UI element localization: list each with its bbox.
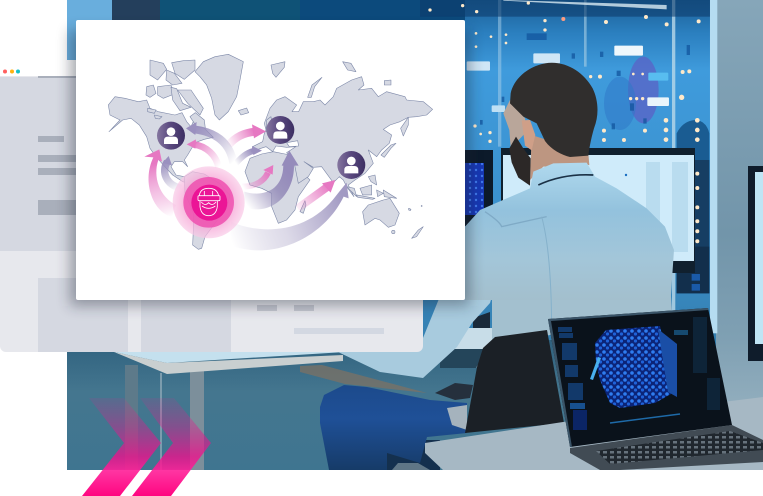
arrow to africa pink — [242, 165, 273, 187]
upper sidebar block — [0, 77, 100, 251]
window dots — [3, 70, 20, 74]
chevron 1 — [82, 398, 161, 496]
left dark monitor — [465, 150, 493, 226]
laptop screen data cloud — [595, 326, 671, 408]
indonesia — [347, 175, 397, 199]
rear desk and keyboard — [440, 312, 493, 368]
head — [503, 63, 597, 186]
browser title bar — [0, 60, 77, 77]
black sea — [287, 141, 299, 147]
greenland — [195, 54, 243, 120]
window body — [0, 76, 423, 352]
arrow to canada purple — [186, 122, 233, 163]
lower content blocks — [38, 278, 128, 352]
front desk — [425, 397, 763, 470]
concrete wall — [716, 0, 763, 402]
chevron 2 — [132, 398, 211, 496]
hair — [510, 63, 597, 157]
new zealand — [412, 227, 423, 238]
shirt sleeve — [339, 298, 491, 378]
australia — [363, 198, 399, 227]
photo background glass wall — [423, 0, 716, 347]
novaya zemlya — [308, 77, 322, 97]
user marker europe — [266, 116, 294, 144]
user marker asia — [337, 151, 365, 179]
arrow to india pink — [298, 180, 335, 208]
hand — [435, 383, 473, 400]
madagascar — [300, 201, 306, 213]
arrow to middle east purple — [244, 151, 299, 209]
iceland — [238, 108, 249, 115]
shirt body — [465, 163, 674, 300]
neck — [530, 135, 589, 180]
world threat map — [108, 54, 433, 250]
continents — [108, 54, 433, 249]
lower torso — [492, 295, 672, 340]
laptop — [548, 308, 763, 470]
chair base — [392, 463, 430, 470]
background browser window — [0, 60, 423, 352]
right monitor — [748, 166, 763, 361]
japan — [381, 143, 396, 157]
kamchatka island — [401, 117, 408, 136]
icon: masked hacker — [198, 188, 220, 216]
attack arrows — [144, 122, 349, 250]
glass panel frames and lights — [420, 0, 717, 333]
under desk shadow — [387, 440, 440, 470]
eurasia — [252, 77, 433, 197]
placeholder bars — [38, 136, 83, 215]
arctic islands — [146, 60, 205, 128]
floor — [67, 340, 567, 470]
face — [503, 100, 527, 148]
user marker north america — [157, 122, 185, 150]
arrow to north america pink — [144, 149, 176, 217]
beard — [509, 137, 531, 186]
top left window strip — [67, 0, 465, 60]
africa — [245, 152, 310, 223]
shirt cuff — [447, 405, 467, 430]
operator legs — [320, 385, 467, 470]
south america — [184, 172, 230, 249]
map card shadow — [70, 30, 470, 306]
british isles — [266, 117, 273, 132]
operator man — [338, 63, 674, 378]
office chair — [465, 330, 564, 433]
attacker target rings — [173, 166, 245, 238]
map card — [76, 20, 465, 300]
office desk — [114, 352, 427, 470]
server rack — [676, 120, 710, 246]
collar line — [538, 175, 593, 185]
small label bars — [257, 305, 277, 311]
arrow to europe purple — [236, 146, 262, 163]
arrow to canada pink — [187, 139, 219, 168]
svalbard — [271, 62, 285, 77]
arrow to europe pink — [229, 124, 266, 145]
central monitor — [501, 148, 695, 273]
chevron arrows — [82, 398, 211, 496]
arrow to asia purple — [231, 183, 349, 250]
ear — [522, 120, 535, 150]
arrow to north america purple — [163, 156, 181, 188]
north america — [108, 97, 213, 183]
